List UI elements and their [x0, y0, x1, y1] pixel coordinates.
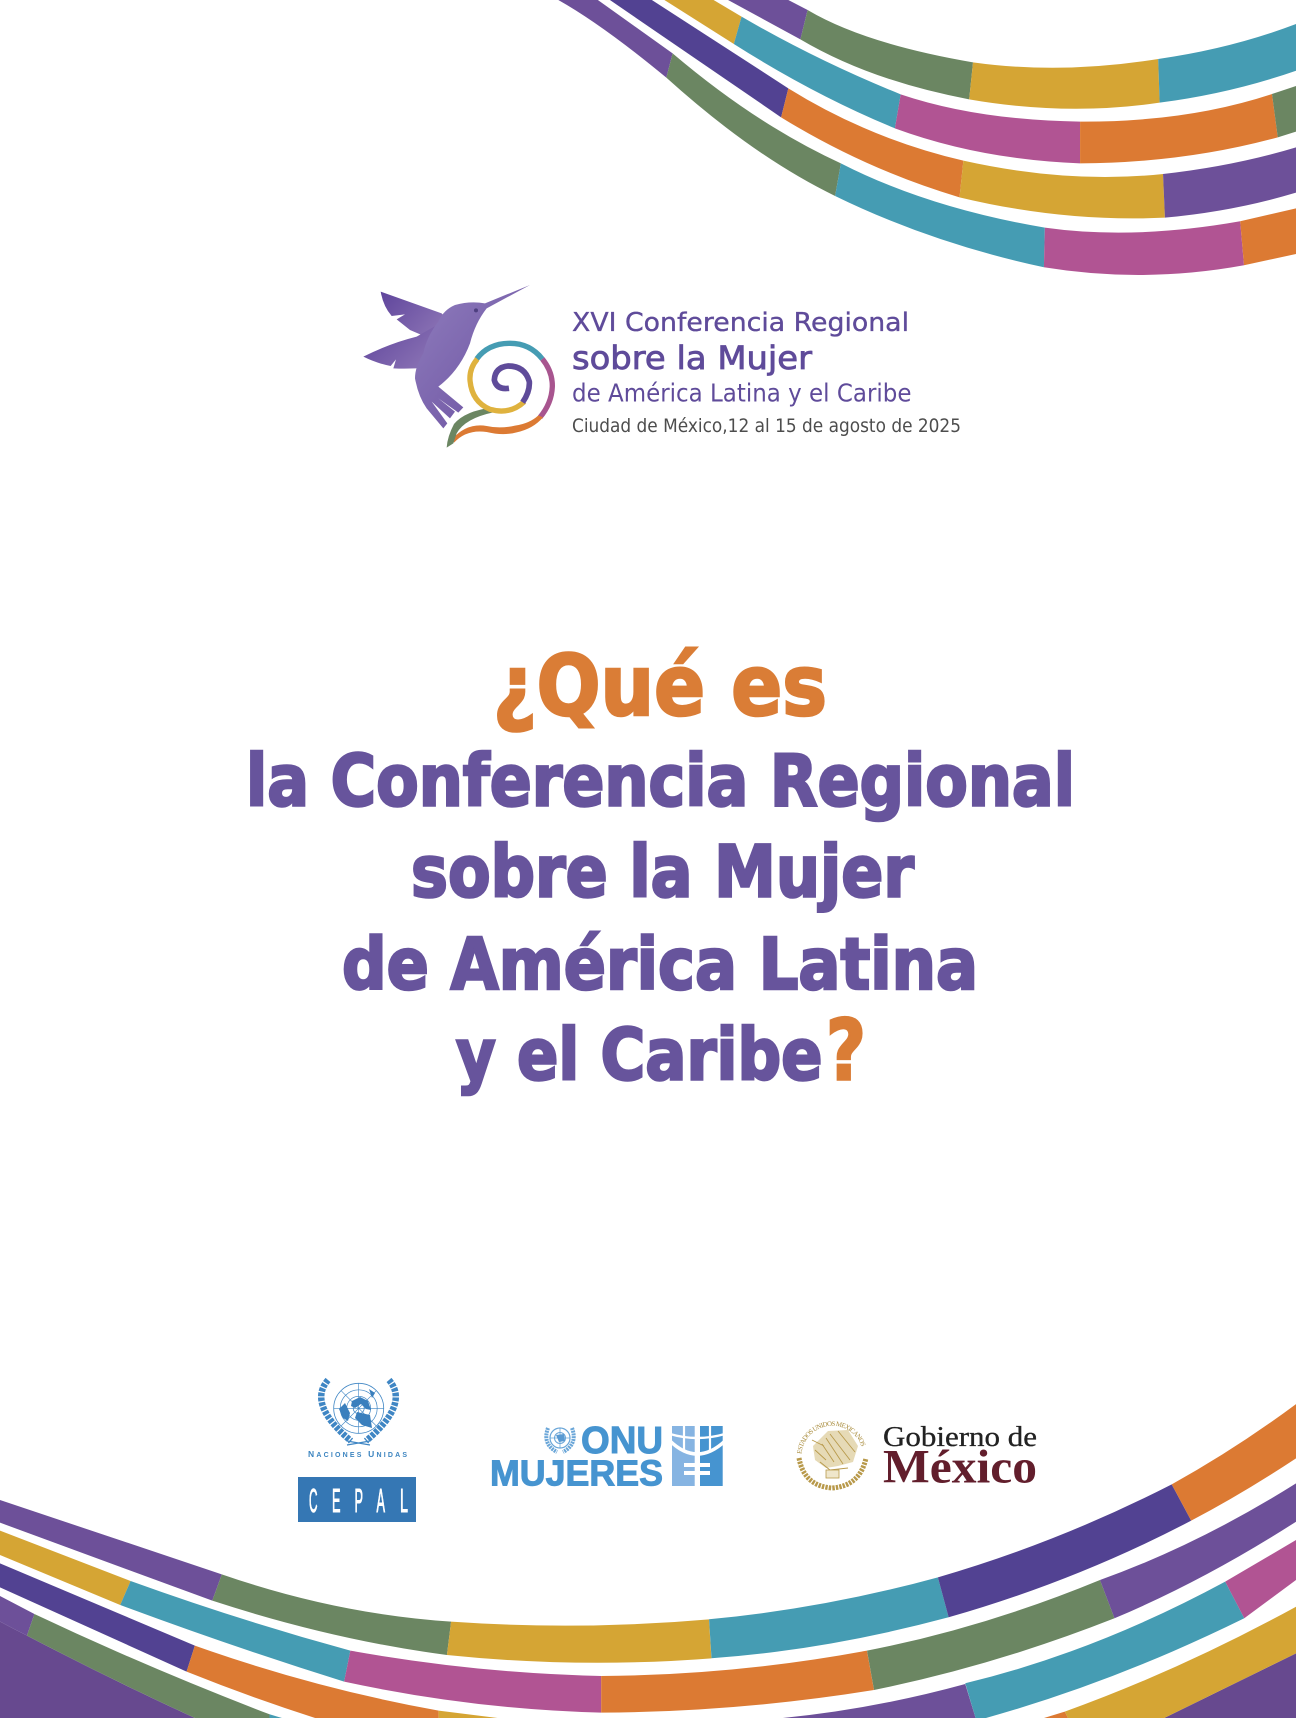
icon: small UN emblem	[546, 1428, 574, 1452]
logo: ONU Mujeres	[490, 1420, 725, 1493]
CEPAL box: P	[354, 1482, 363, 1519]
text: Naciones Unidas: N ACIONES U NIDAS	[308, 1449, 407, 1459]
bottom ribbon bands, left part	[0, 1500, 874, 1718]
top band 1	[728, 0, 1296, 109]
logo text: sobre la Mujer	[572, 339, 813, 377]
bottom-right purple corner	[1164, 1653, 1296, 1718]
logo text: de América Latina y el Caribe	[572, 379, 912, 408]
bottom band 1 right	[709, 1404, 1296, 1658]
bottom band 4 right	[1065, 1607, 1296, 1718]
bottom ribbon bands, right part	[709, 1404, 1296, 1718]
conference logo	[363, 285, 961, 448]
bottom band 1 left	[0, 1500, 711, 1663]
top ribbon bands	[558, 0, 1296, 275]
icon: spiral	[447, 343, 552, 448]
CEPAL box: A	[376, 1482, 385, 1519]
CEPAL box: L	[400, 1482, 408, 1519]
title: ?	[826, 1002, 866, 1100]
title	[246, 637, 1075, 1100]
bottom band 4 left	[0, 1596, 282, 1718]
CEPAL box	[298, 1477, 416, 1522]
text: ONU MUJERES	[490, 1420, 663, 1493]
title: sobre la Mujer	[411, 830, 914, 914]
text: Gobierno de: Gobierno de	[883, 1422, 1037, 1453]
bottom band 3 right	[783, 1540, 1296, 1718]
top band 2	[664, 0, 1296, 163]
logo: Gobierno de México	[796, 1421, 1037, 1494]
title: de América Latina	[342, 923, 978, 1006]
title: y el Caribe	[456, 1014, 822, 1096]
bottom band 3 left	[0, 1563, 498, 1718]
top band 4	[558, 0, 1296, 275]
CEPAL box: C	[309, 1482, 318, 1519]
logo text	[572, 308, 961, 437]
top band 3	[610, 0, 1296, 218]
icon: Mexican coat of arms	[796, 1421, 868, 1490]
title: ¿Qué es	[493, 637, 827, 735]
icon: UN emblem	[321, 1380, 396, 1445]
icon: ONU Mujeres mark	[670, 1426, 725, 1486]
logo text: Ciudad de México,12 al 15 de agosto de 2025	[572, 415, 961, 437]
logo: Naciones Unidas CEPAL	[298, 1380, 416, 1522]
bottom band 2 left	[0, 1531, 874, 1713]
bottom-left purple corner	[0, 1622, 195, 1718]
bottom band 2 right	[867, 1483, 1296, 1690]
text: ONU MUJERES: ONU	[581, 1420, 663, 1462]
icon: Mexican coat of arms: ESTADOS UNIDOS MEXICANOS	[797, 1421, 866, 1454]
text: México: México	[883, 1441, 1037, 1494]
icon: hummingbird	[363, 285, 530, 428]
text: ONU MUJERES: MUJERES	[490, 1452, 663, 1493]
CEPAL box: E	[332, 1482, 340, 1519]
title: la Conferencia Regional	[246, 740, 1075, 822]
logo text: XVI Conferencia Regional	[572, 308, 909, 338]
